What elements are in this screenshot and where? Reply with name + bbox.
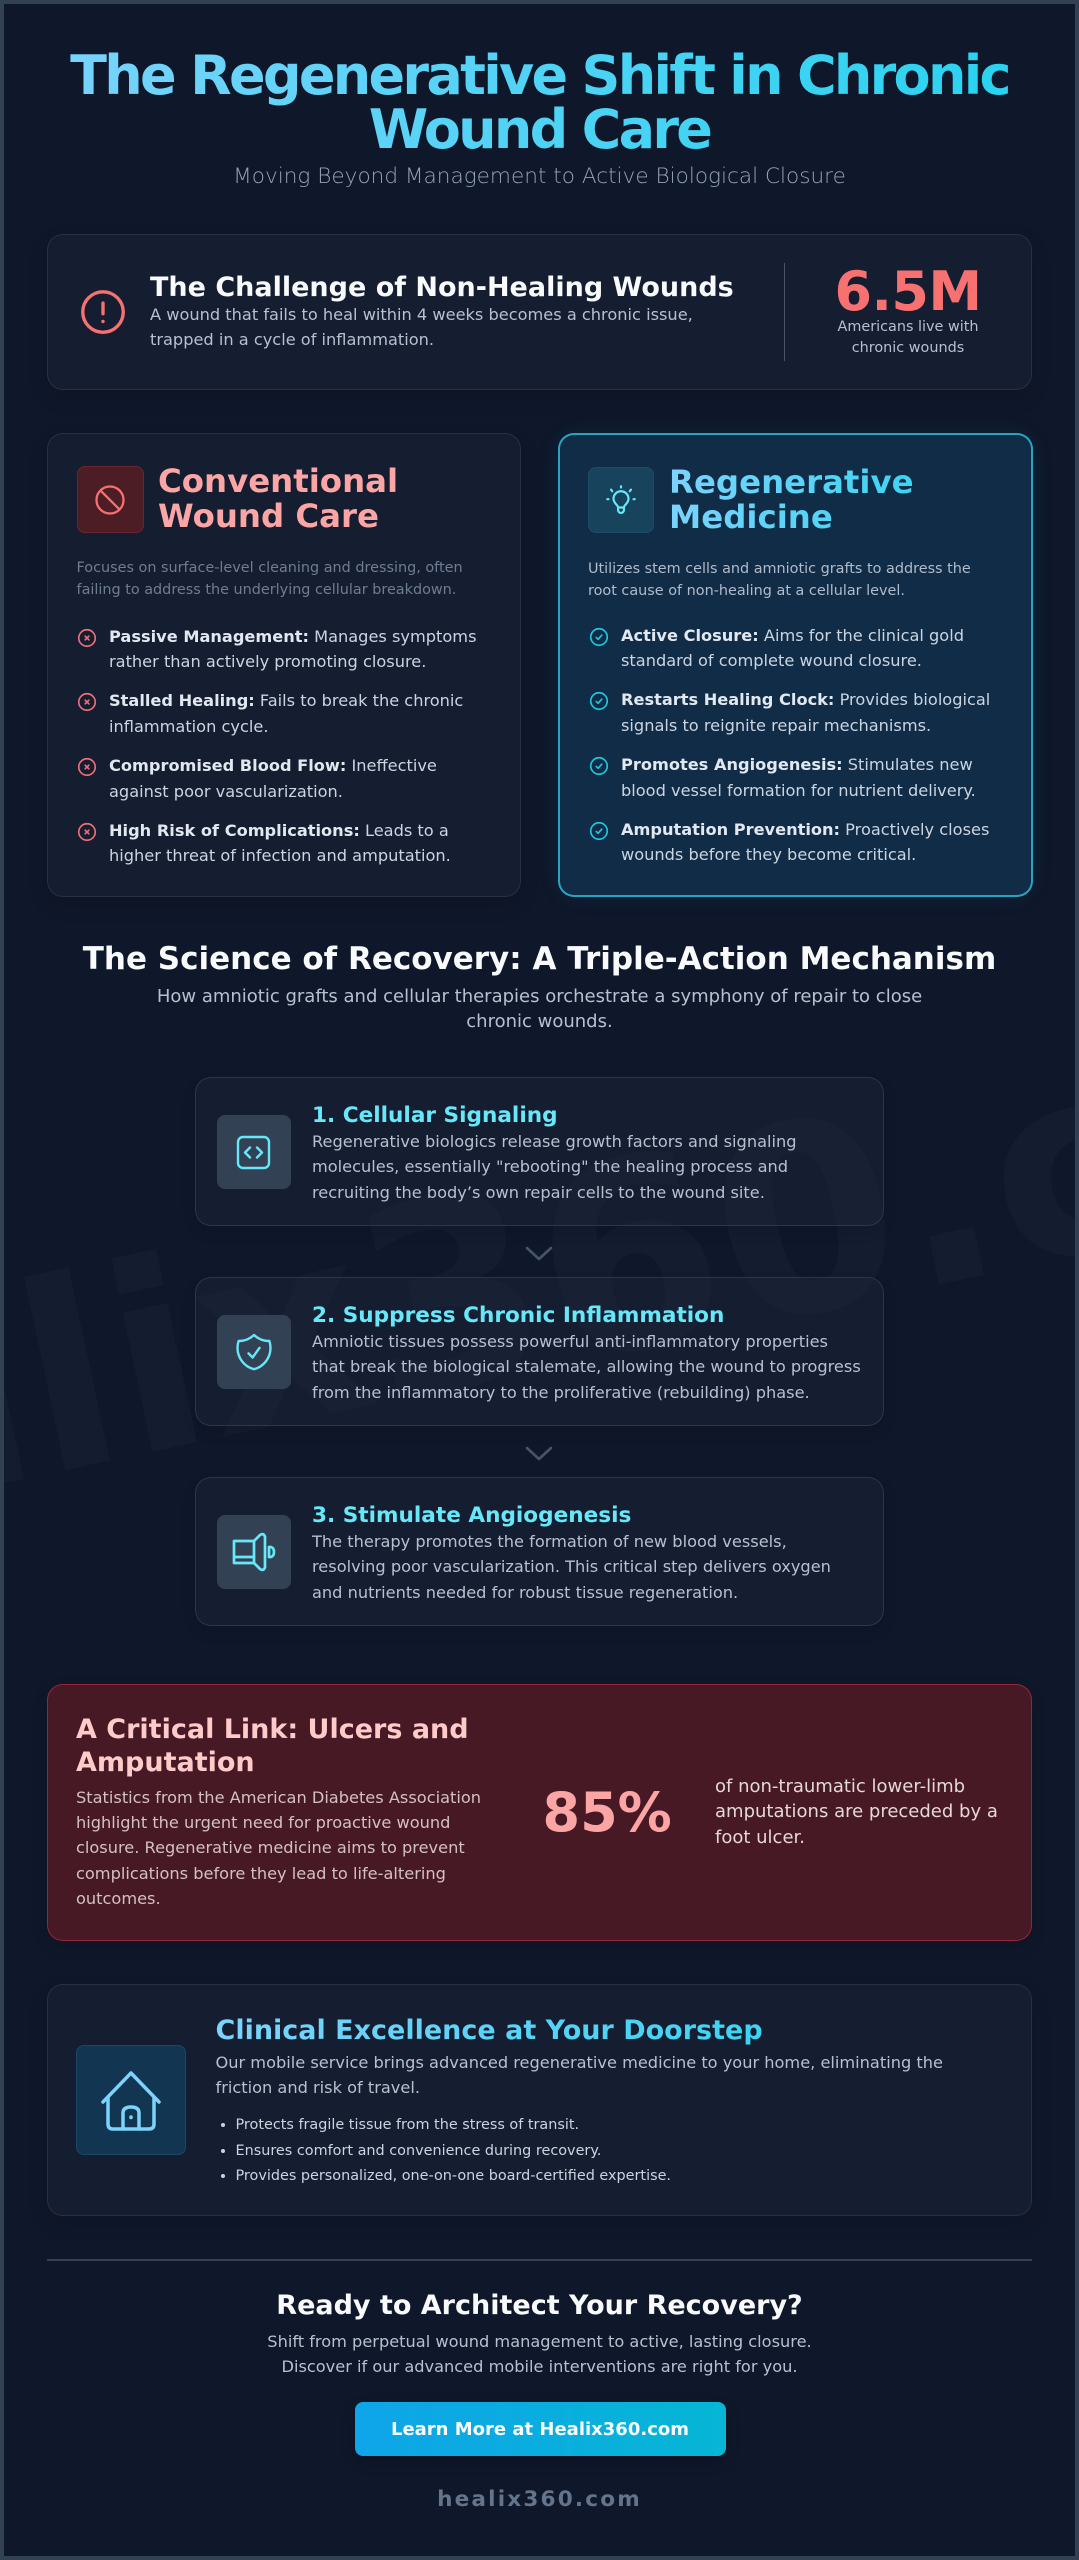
section subtitle: How amniotic grafts and cellular therapies orchestrate a symphony of repair to close (157, 986, 922, 1007)
step text (312, 1332, 861, 1402)
doorstep heading: Clinical Excellence at Your Doorstep (216, 2015, 763, 2046)
critical link text: outcomes. (76, 1889, 161, 1908)
item: restarts healing clock (590, 690, 990, 735)
stat caption (715, 1776, 998, 1848)
panel: regenerative medicine (558, 433, 1033, 897)
critical link text: complications before they lead to life-altering (76, 1864, 446, 1883)
call to action (267, 2290, 812, 2512)
section subtitle: chronic wounds. (466, 1011, 613, 1032)
stat number: 6.5M (834, 260, 982, 323)
item: stalled healing: Stalled Healing: Fails to break the chronic (109, 691, 463, 710)
regenerative description (588, 561, 971, 598)
arrow: step 2 to 3 (526, 1446, 552, 1460)
item: passive management: rather than actively promoting closure. (109, 652, 426, 671)
section subtitle (157, 986, 922, 1032)
item: restarts healing clock: Restarts Healing Clock: Provides biological (621, 690, 990, 709)
step text: The therapy promotes the formation of new blood vessels, (312, 1532, 787, 1551)
icon: code square (217, 1115, 291, 1189)
section title: The Science of Recovery: A Triple-Action Mechanism (83, 941, 996, 977)
step text: that break the biological stalemate, allowing the wound to progress (312, 1357, 861, 1376)
cta text (267, 2332, 812, 2376)
challenge text: A wound that fails to heal within 4 weeks becomes a chronic issue, (150, 305, 693, 324)
cta button (354, 2402, 726, 2456)
step 1: cellular signaling (195, 1077, 884, 1226)
item: amputation prevention (590, 820, 989, 864)
item: amputation prevention: wounds before they become critical. (621, 845, 916, 864)
cta text: Discover if our advanced mobile interventions are right for you. (281, 2357, 798, 2376)
item: stalled healing (78, 691, 463, 736)
item: stalled healing: inflammation cycle. (109, 717, 268, 736)
cta button: Learn More at Healix360.com (391, 2419, 689, 2440)
icon: exclamation circle (81, 290, 125, 334)
footer url: healix360.com (437, 2487, 642, 2512)
step title: 3. Stimulate Angiogenesis (312, 1503, 631, 1528)
stat caption: of non-traumatic lower-limb (715, 1776, 965, 1797)
challenge heading: The Challenge of Non-Healing Wounds (150, 272, 734, 302)
conventional heading (158, 462, 398, 535)
title (0, 49, 1079, 157)
step text: and nutrients needed for robust tissue regeneration. (312, 1583, 738, 1602)
item: promotes angiogenesis (590, 755, 976, 800)
critical link text (76, 1788, 481, 1908)
item: active closure (590, 626, 964, 670)
panel: clinical excellence at your doorstep (47, 1984, 1032, 2216)
icon: light bulb (588, 467, 654, 533)
item: active closure: standard of complete wound closure. (621, 651, 922, 670)
section: science of recovery heading (82, 941, 996, 1032)
regenerative description: Utilizes stem cells and amniotic grafts to address the (588, 561, 971, 577)
step title: 2. Suppress Chronic Inflammation (312, 1303, 724, 1328)
icon: shield check (217, 1315, 291, 1389)
item: compromised blood flow: Compromised Blood Flow: Ineffective (109, 756, 437, 775)
item: compromised blood flow: against poor vascularization. (109, 782, 343, 801)
item: compromised blood flow (78, 756, 437, 801)
item: amputation prevention: Amputation Prevention: Proactively closes (621, 820, 989, 839)
critical link heading: A Critical Link: Ulcers and (76, 1714, 469, 1745)
panel: conventional wound care (47, 433, 521, 897)
stat caption: Americans live with (837, 319, 979, 335)
regenerative heading: Medicine (669, 498, 833, 536)
doorstep bullets: Protects fragile tissue from the stress of transit. (236, 2117, 579, 2133)
stat caption: foot ulcer. (715, 1827, 805, 1848)
panel: ulcers and amputation (47, 1684, 1032, 1941)
conventional description (76, 560, 463, 598)
item: high risk: High Risk of Complications: Leads to a (109, 821, 449, 840)
doorstep bullets: Provides personalized, one-on-one board-certified expertise. (236, 2168, 671, 2184)
doorstep text: friction and risk of travel. (216, 2078, 420, 2097)
doorstep text: Our mobile service brings advanced regenerative medicine to your home, eliminating the (216, 2053, 943, 2072)
stat caption: amputations are preceded by a (715, 1801, 998, 1822)
step 2: suppress inflammation (195, 1277, 884, 1426)
item: active closure: Active Closure: Aims for the clinical gold (621, 626, 964, 645)
title: The Regenerative Shift in Chronic (70, 44, 1009, 107)
critical link heading (76, 1714, 469, 1778)
header (70, 44, 1009, 189)
critical link text: closure. Regenerative medicine aims to prevent (76, 1838, 465, 1857)
step text: Amniotic tissues possess powerful anti-inflammatory properties (312, 1332, 828, 1351)
subtitle: Moving Beyond Management to Active Biological Closure (233, 164, 846, 189)
conventional heading: Conventional (158, 462, 398, 500)
cta heading: Ready to Architect Your Recovery? (276, 2290, 803, 2321)
critical link heading: Amputation (76, 1747, 255, 1778)
icon: vessel device (217, 1515, 291, 1589)
stat: 85%: 85% (542, 1781, 672, 1844)
item: restarts healing clock: signals to reignite repair mechanisms. (621, 716, 931, 735)
step text (312, 1532, 831, 1602)
step text: recruiting the body’s own repair cells to the wound site. (312, 1183, 765, 1202)
item: passive management (78, 627, 477, 671)
step text: resolving poor vascularization. This critical step delivers oxygen (312, 1557, 831, 1576)
stat caption: chronic wounds (852, 340, 964, 356)
regenerative heading (669, 464, 914, 535)
arrow: step 1 to 2 (526, 1246, 552, 1260)
step text (312, 1132, 797, 1202)
step text: from the inflammatory to the proliferative (rebuilding) phase. (312, 1383, 810, 1402)
challenge text (150, 305, 693, 349)
step text: Regenerative biologics release growth factors and signaling (312, 1132, 797, 1151)
item: promotes angiogenesis: blood vessel formation for nutrient delivery. (621, 781, 976, 800)
conventional heading: Wound Care (158, 497, 379, 535)
conventional description: Focuses on surface-level cleaning and dressing, often (76, 560, 463, 576)
critical link text: Statistics from the American Diabetes Association (76, 1788, 481, 1807)
item: passive management: Passive Management: Manages symptoms (109, 627, 477, 646)
item: high risk (78, 821, 451, 865)
doorstep bullets: Ensures comfort and convenience during recovery. (236, 2142, 601, 2158)
step text: molecules, essentially "rebooting" the healing process and (312, 1157, 788, 1176)
divider (47, 2259, 1032, 2261)
item: promotes angiogenesis: Promotes Angiogenesis: Stimulates new (621, 755, 973, 774)
regenerative heading: Regenerative (669, 462, 914, 500)
icon: home (76, 2045, 186, 2155)
regenerative description: root cause of non-healing at a cellular level. (588, 582, 905, 598)
stat: 6.5M (784, 263, 1004, 361)
step title: 1. Cellular Signaling (312, 1103, 558, 1128)
panel: challenge (47, 234, 1032, 390)
doorstep bullets (221, 2117, 671, 2184)
challenge text: trapped in a cycle of inflammation. (150, 330, 434, 349)
doorstep text (216, 2053, 943, 2097)
icon: no symbol (76, 466, 144, 533)
critical link text: highlight the urgent need for proactive wound (76, 1813, 450, 1832)
item: high risk: higher threat of infection and amputation. (109, 846, 451, 865)
step 3: stimulate angiogenesis (195, 1477, 884, 1626)
stat caption (837, 319, 979, 356)
title: Wound Care (369, 98, 710, 161)
conventional description: failing to address the underlying cellular breakdown. (76, 582, 456, 598)
cta text: Shift from perpetual wound management to active, lasting closure. (267, 2332, 812, 2351)
